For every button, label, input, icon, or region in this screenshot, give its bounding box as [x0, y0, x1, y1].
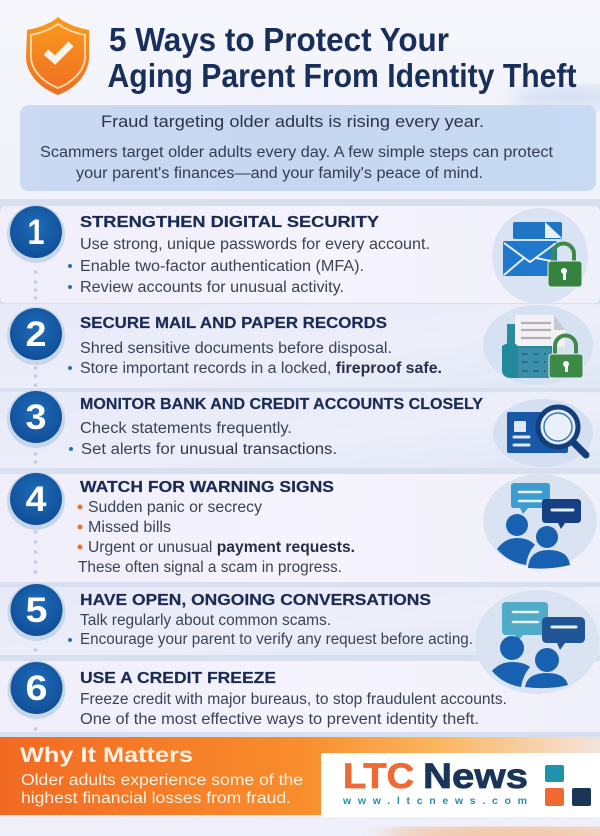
panel: step 5	[0, 583, 600, 655]
step 3 text: Set alerts for unusual transactions.	[81, 441, 337, 458]
step 4 text: Sudden panic or secrecy	[88, 499, 262, 516]
step 4 text: Urgent or unusual payment requests.	[88, 539, 355, 556]
panel: step 1	[0, 205, 600, 304]
step 5 number	[8, 583, 66, 641]
step 1 number: 1	[28, 213, 44, 252]
step 5 number: 5	[26, 591, 48, 630]
panel: step 2	[0, 304, 600, 388]
step 2 heading: SECURE MAIL AND PAPER RECORDS	[80, 315, 387, 332]
panel: intro: your parent's finances—and your family's peace of mind.	[76, 165, 483, 182]
step 4 number: 4	[26, 480, 47, 519]
logo: LTC News: News	[423, 757, 528, 796]
step 6 number: 6	[26, 669, 48, 708]
step 4 text: Missed bills	[88, 519, 171, 536]
step 5 text	[68, 612, 473, 648]
panel: why it matters	[0, 737, 600, 815]
step 1 heading: STRENGTHEN DIGITAL SECURITY	[80, 214, 380, 231]
step 1 text	[68, 236, 430, 296]
step 5 heading: HAVE OPEN, ONGOING CONVERSATIONS	[80, 592, 431, 609]
step 6 text: One of the most effective ways to prevent identity theft.	[80, 711, 479, 728]
step 1 text: Review accounts for unusual activity.	[80, 279, 344, 296]
banner text: highest financial losses from fraud.	[21, 790, 291, 807]
banner text	[21, 772, 303, 807]
step 1 text: Use strong, unique passwords for every account.	[80, 236, 430, 253]
step 5 text: Talk regularly about common scams.	[80, 612, 331, 629]
icon: shield with check mark	[26, 17, 89, 95]
step bands	[0, 199, 600, 737]
step 1 text: Enable two-factor authentication (MFA).	[80, 258, 364, 275]
panel: intro: Fraud targeting older adults is rising every year.	[101, 112, 484, 131]
step 4 text	[78, 499, 355, 576]
step 3 number: 3	[26, 398, 46, 437]
title: 5 Ways to Protect Your	[109, 21, 449, 58]
logo: LTC News: LTC	[343, 757, 414, 796]
title	[108, 21, 577, 94]
step 2 number: 2	[26, 315, 46, 354]
panel: intro: Scammers target older adults every day. A few simple steps can protect	[40, 144, 554, 161]
step 6 heading: USE A CREDIT FREEZE	[80, 670, 276, 687]
timeline dots	[34, 270, 37, 731]
step 4 heading: WATCH FOR WARNING SIGNS	[80, 479, 334, 496]
icon: file folder and padlock	[483, 305, 593, 385]
step 3 text: Check statements frequently.	[80, 420, 292, 437]
banner text: Older adults experience some of the	[21, 772, 303, 789]
icon: envelope and padlock	[492, 208, 588, 304]
panel: step 3	[0, 390, 600, 468]
step 1 number	[7, 205, 65, 263]
panel: step 4	[0, 472, 600, 582]
icon: two people talking, step 5	[475, 590, 599, 694]
step 5 text: Encourage your parent to verify any request before acting.	[80, 631, 473, 648]
panel: intro	[20, 105, 596, 191]
step 2 number	[7, 307, 65, 365]
step 2 text	[68, 340, 442, 377]
step 2 text: Store important records in a locked, fireproof safe.	[80, 360, 442, 377]
banner heading: Why It Matters	[20, 744, 193, 767]
panel: step 6	[0, 661, 600, 732]
step 3 number	[7, 390, 65, 448]
icon: two people talking	[483, 474, 597, 569]
step 2 text: Shred sensitive documents before disposal.	[80, 340, 392, 357]
step 4 text: These often signal a scam in progress.	[78, 559, 342, 576]
logo: LTC News: www.ltcnews.com	[342, 795, 527, 807]
step 6 text	[80, 691, 507, 728]
icon: account card and magnifier	[493, 399, 593, 467]
step 6 number	[8, 661, 66, 719]
step 3 heading: MONITOR BANK AND CREDIT ACCOUNTS CLOSELY	[80, 396, 484, 413]
step 3 text	[69, 420, 337, 458]
step 4 number	[7, 472, 65, 530]
logo: LTC News	[321, 753, 600, 817]
step 6 text: Freeze credit with major bureaus, to stop fraudulent accounts.	[80, 691, 507, 708]
